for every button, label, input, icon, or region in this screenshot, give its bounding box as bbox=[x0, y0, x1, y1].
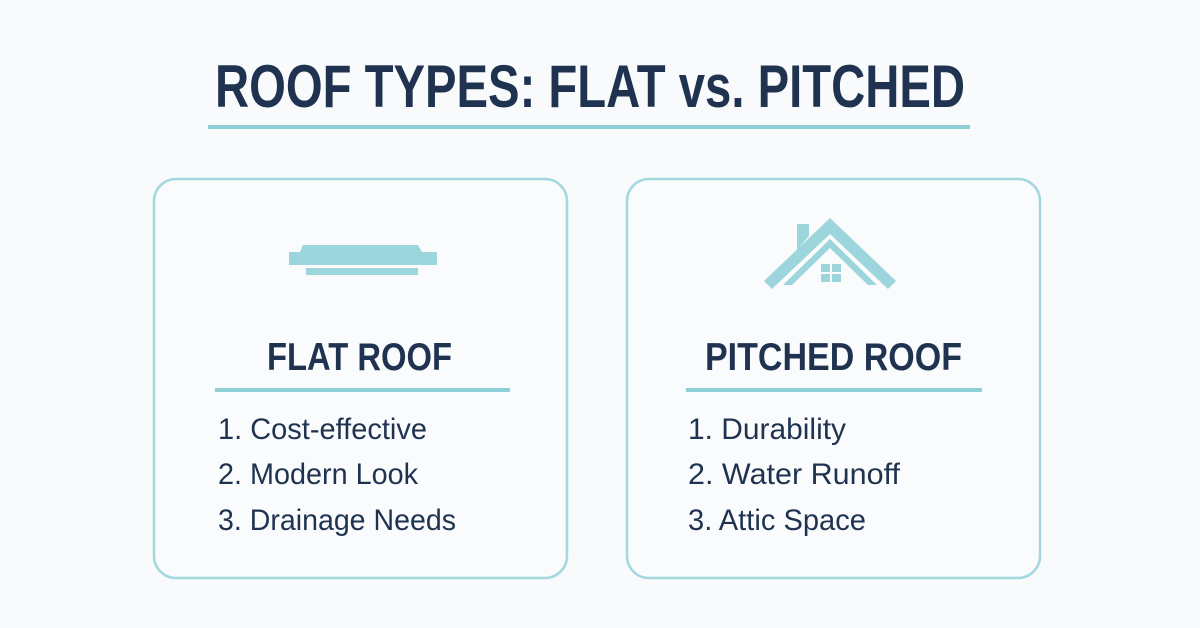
icon: house bbox=[764, 218, 896, 289]
icon: flat roof bbox=[289, 245, 437, 275]
list: flat roof benefits: 3. Drainage Needs bbox=[218, 504, 456, 537]
list: flat roof benefits: 1. Cost-effective bbox=[218, 413, 427, 446]
list: pitched roof benefits: 3. Attic Space bbox=[688, 504, 866, 537]
panel: flat roof bbox=[154, 179, 567, 578]
list: pitched roof benefits: 2. Water Runoff bbox=[688, 458, 901, 491]
list: flat roof benefits bbox=[218, 413, 456, 537]
list: flat roof benefits: 2. Modern Look bbox=[218, 458, 419, 491]
title: ROOF TYPES: FLAT vs. PITCHED bbox=[215, 53, 965, 120]
panel: pitched roof bbox=[627, 179, 1040, 578]
heading: flat roof: FLAT ROOF bbox=[267, 336, 452, 379]
list: pitched roof benefits bbox=[688, 413, 901, 537]
list: pitched roof benefits: 1. Durability bbox=[688, 413, 846, 446]
heading: pitched roof: PITCHED ROOF bbox=[705, 336, 962, 379]
